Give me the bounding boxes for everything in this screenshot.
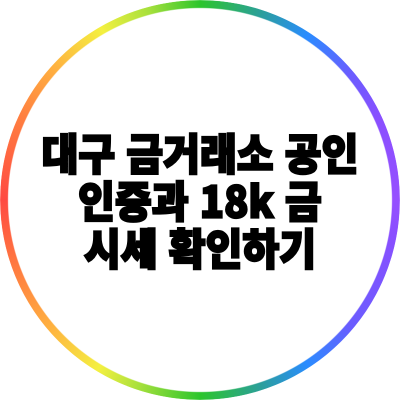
title: 대구 금거래소 공인 — [42, 120, 358, 183]
title — [42, 120, 358, 278]
title: 시세 확인하기 — [84, 215, 316, 278]
title: 인증과 18k 금 — [78, 168, 322, 231]
